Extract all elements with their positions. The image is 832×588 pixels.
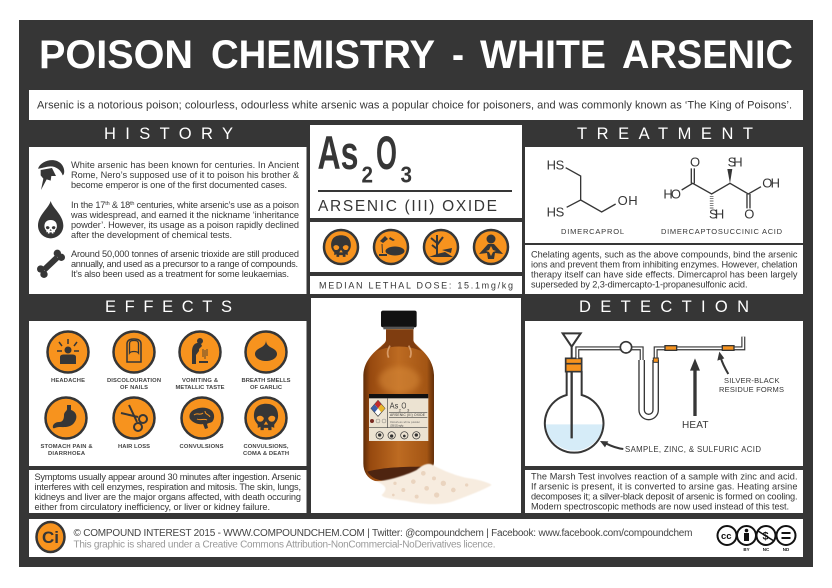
title [39, 33, 793, 77]
chemical formula: 3 [400, 162, 412, 188]
icon: skull [246, 398, 286, 438]
structure: dimercaprol: HS [547, 157, 565, 172]
panel: detection text: Modern spectroscopic methods are now used instead of this test. [531, 502, 789, 512]
glass tubing [577, 337, 743, 417]
label: hair loss: HAIR LOSS [118, 444, 150, 450]
text: history paragraph 2: powder’. However, its usage as a poison rapidly declined [71, 220, 299, 230]
bottle label: 2 [399, 407, 402, 412]
chemical formula: O [376, 126, 397, 179]
logo: compound interest: Ci [42, 528, 59, 547]
label: discolouration of nails [107, 378, 161, 391]
icon: scissors [114, 398, 154, 438]
text: history paragraph 1: Rome, Nero’s supposed use of it to poison his brother & [71, 170, 299, 180]
label: discolouration of nails: OF NAILS [120, 385, 148, 391]
structure: dimercaptosuccinic acid [663, 155, 780, 221]
icon: environmental hazard [424, 230, 458, 264]
bottle label: As [390, 401, 398, 410]
arrow: silver-black residue [717, 352, 728, 374]
text: history paragraph 2: th [130, 201, 134, 207]
title: POISON [39, 33, 193, 77]
logo: compound interest [36, 522, 64, 552]
icon: bone [37, 250, 65, 278]
footer [29, 519, 803, 557]
heading: treatment: TREATMENT [577, 125, 753, 143]
structure: dimercaprol [547, 157, 638, 220]
icon: headache [48, 332, 88, 372]
label: breath smells of garlic [242, 378, 291, 391]
label: vomiting and metallic taste: VOMITING & [182, 378, 218, 384]
structure: dimercaptosuccinic acid: HO [663, 186, 681, 201]
label: heat: HEAT [682, 420, 708, 431]
icon: corrosive [374, 230, 408, 264]
powder pile [377, 464, 492, 504]
icon: discolouration of nails [114, 332, 154, 372]
text: history paragraph 2: was widespread, and earned it the nickname ‘inheritance [70, 210, 299, 220]
structure: dimercaptosuccinic acid: OH [762, 176, 780, 191]
structure: dimercaptosuccinic acid: O [690, 155, 700, 170]
label: silver-black residue forms: SILVER-BLACK [724, 376, 780, 385]
label: breath smells of garlic: OF GARLIC [250, 385, 283, 391]
text: history paragraph 2: after the development of chemical tests. [71, 230, 232, 240]
panel: detection text [525, 470, 803, 513]
chemical formula: As [318, 126, 358, 179]
bottle label: O [401, 401, 406, 410]
panel: detection text: decomposes it; a silver-black deposit of arsenic is formed on cooling. [531, 492, 798, 502]
bottle label: LD50 15.1mg/kg [390, 426, 404, 428]
panel: treatment text: Chelating agents, such as the above compounds, bind the arsenic [531, 250, 798, 260]
panel: hazard icons [310, 222, 522, 272]
label: breath smells of garlic: BREATH SMELLS [242, 378, 291, 384]
text: history paragraph 2: & 18 [109, 200, 130, 210]
icon: vomiting [180, 332, 220, 372]
label: silver-black residue forms [719, 376, 784, 394]
text: history paragraph 1 [71, 160, 299, 190]
panel: median lethal dose: MEDIAN LETHAL DOSE: 15.1mg/kg [319, 280, 513, 290]
label: sample, zinc and sulfuric acid: SAMPLE, ZINC, & SULFURIC ACID [625, 445, 761, 454]
label: vomiting and metallic taste [176, 378, 225, 391]
title: - [452, 33, 464, 77]
label: silver-black residue forms: RESIDUE FORMS [719, 385, 784, 394]
text: history paragraph 3: annually, and used as a precursor to a range of compounds. [71, 259, 298, 269]
label: discolouration of nails: DISCOLOURATION [107, 378, 161, 384]
panel: compound name [310, 125, 522, 218]
bottle label: 3 [407, 407, 410, 412]
structure: dimercaptosuccinic acid: O [744, 206, 754, 221]
icon: garlic [246, 332, 286, 372]
panel: effects text: either from circulatory inefficiency, or liver or kidney failure. [34, 502, 270, 512]
label: dimercaptosuccinic acid: DIMERCAPTOSUCCINIC ACID [661, 227, 783, 236]
structure: dimercaprol: OH [618, 193, 638, 208]
label: convulsions: CONVULSIONS [180, 444, 224, 450]
intro banner [29, 90, 803, 120]
text: history paragraph 3 [71, 249, 299, 279]
flask [545, 333, 603, 453]
bottle label: ARSENIC (III) OXIDE [390, 413, 426, 417]
Marsh test apparatus [545, 333, 743, 453]
heading: history: HISTORY [104, 125, 233, 143]
icon: stomach [46, 398, 86, 438]
text: history paragraph 3: Around 50,000 tonnes of arsenic trioxide are still produced [71, 249, 299, 259]
panel: treatment text: ions and prevent them from inhibiting enzymes. However, chelation [531, 260, 798, 270]
panel: effects icons [29, 321, 306, 466]
text: history paragraph 1: White arsenic has been known for centuries. In Ancient [71, 160, 299, 170]
icon: health hazard [474, 230, 508, 264]
structure: dimercaprol: HS [547, 205, 565, 220]
icon: poison drop [38, 201, 63, 238]
arrow: heat [690, 358, 700, 416]
panel: effects text [29, 470, 306, 513]
icon: roman helmet [38, 160, 64, 190]
panel: treatment text [525, 245, 803, 294]
label: convulsions, coma and death [243, 444, 289, 457]
text: history paragraph 1: become emperor is one of the first documented cases. [71, 180, 287, 190]
panel: history [29, 147, 306, 294]
panel: detection text: If arsenic is present, it is converted to arsine gas. Heating arsine [531, 482, 798, 492]
structure: dimercaptosuccinic acid: SH [709, 206, 724, 221]
bottle [363, 311, 434, 481]
icon: creative commons badges: BY [743, 547, 750, 552]
footer credit line: © COMPOUND INTEREST 2015 - WWW.COMPOUNDCHEM.COM | Twitter: @compoundchem | Facebook: www.facebook.com/compoundchem [74, 528, 692, 539]
panel: treatment text: therapy itself can have side effects. Dimercaprol has been largely [531, 270, 798, 280]
icon: brain [182, 398, 222, 438]
panel: detection diagram [525, 321, 803, 466]
panel: effects text: Symptoms usually appear around 30 minutes after ingestion. Arsenic [34, 472, 301, 482]
chemical formula [318, 126, 412, 188]
label: convulsions, coma and death: COMA & DEATH [243, 451, 289, 457]
footer licence line: This graphic is shared under a Creative Commons Attribution-NonCommercial-NoDerivatives licence. [74, 540, 496, 550]
icon: creative commons badges: cc [721, 531, 732, 542]
panel: treatment structures [525, 147, 803, 243]
icon: toxic [324, 230, 358, 264]
title: ARSENIC [622, 33, 793, 77]
heading: effects: EFFECTS [105, 298, 232, 316]
label: vomiting and metallic taste: METALLIC TASTE [176, 385, 225, 391]
panel: effects text: interferes with cell enzymes, respiration and mitosis. The skin, lungs, [34, 482, 301, 492]
arrow: sample [600, 441, 623, 449]
bottle label: Odourless white powder [390, 421, 420, 424]
panel: treatment text: superseded by 2,3-dimercapto-1-propanesulfonic acid. [531, 280, 748, 290]
icon: creative commons badges: NC [763, 547, 770, 552]
panel: detection text: The Marsh Test involves reaction of a sample with zinc and acid. [531, 472, 798, 482]
text: history paragraph 2: centuries, white arsenic’s use as a poison [134, 200, 299, 210]
label: headache: HEADACHE [51, 378, 85, 384]
text: history paragraph 2: In the 17 [71, 200, 105, 210]
label: stomach pain and diarrhoea [40, 444, 92, 457]
icon: creative commons badges [718, 526, 796, 552]
panel: median lethal dose [310, 276, 522, 294]
label: convulsions, coma and death: CONVULSIONS, [244, 444, 289, 450]
text: history paragraph 2: th [105, 201, 110, 207]
panel: bottle photo [311, 298, 521, 513]
compound name: ARSENIC (III) OXIDE [318, 198, 497, 215]
icon: creative commons badges: $ [762, 530, 769, 542]
label: stomach pain and diarrhoea: DIARRHOEA [48, 451, 86, 457]
text: history paragraph 2 [70, 200, 299, 240]
label: stomach pain and diarrhoea: STOMACH PAIN & [40, 444, 92, 450]
structure: dimercaptosuccinic acid: SH [728, 155, 743, 170]
chemical formula: 2 [362, 162, 373, 188]
label: dimercaprol: DIMERCAPROL [561, 227, 624, 236]
intro banner: Arsenic is a notorious poison; colourless, odourless white arsenic was a popular choice for poisoners, and was commonly known as ‘The King of Poisons’. [37, 100, 792, 112]
panel: effects text: kidneys and liver are the major organs affected, with death occuring [34, 492, 301, 502]
heading: detection: DETECTION [579, 298, 749, 316]
title: CHEMISTRY [211, 33, 435, 77]
bottle label [369, 394, 428, 441]
icon: creative commons badges: ND [783, 547, 790, 552]
title: WHITE [480, 33, 606, 77]
text: history paragraph 3: It’s also been used as a treatment for some leukaemias. [71, 269, 289, 279]
